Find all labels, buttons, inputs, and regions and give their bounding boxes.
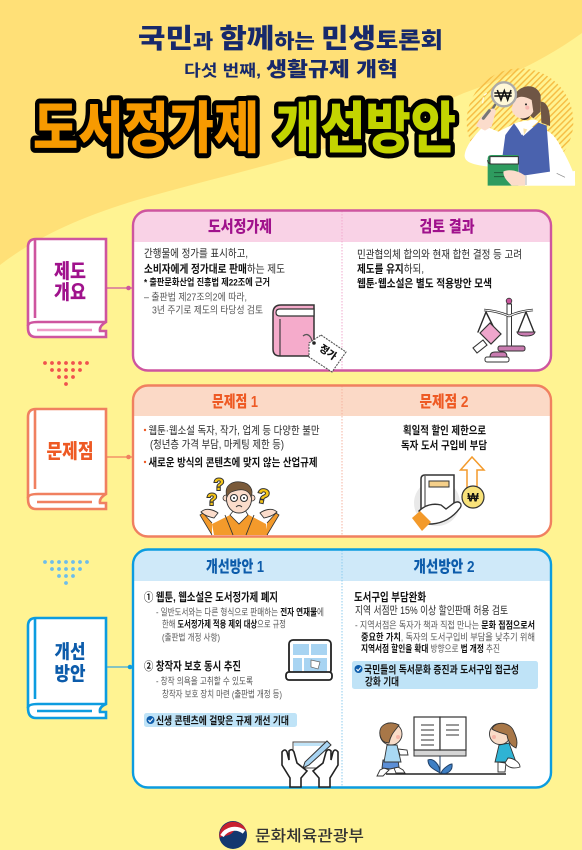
illustration: woman with magnifier and book — [465, 68, 575, 186]
text: 개선방안 1 항목 1: (출판법 개정 사항) — [162, 632, 220, 642]
text: 문제점 2 설명: 획일적 할인 제한으로 — [403, 423, 486, 437]
text: 개선방안 1 항목 2: ② 창작자 보호 동시 추진 — [144, 659, 241, 673]
book label: 제도 개요: 개요 — [54, 281, 86, 304]
text: 개선방안 1 항목 1: - 일반도서와는 다른 형식으로 판매하는 전자 연재물에 — [156, 606, 324, 618]
connector 3 — [107, 665, 132, 669]
child running right — [490, 723, 520, 772]
text: 도서정가제 설명: 3년 주기로 제도의 타당성 검토 — [152, 304, 263, 316]
text: 도서정가제 설명: 간행물에 정가를 표시하고, — [144, 246, 248, 260]
dots: blue — [43, 560, 89, 585]
heading: 문제점 2: 문제점 2 — [420, 393, 469, 411]
text: 개선방안 2 설명 — [354, 590, 535, 655]
panel: 개선방안 — [133, 550, 551, 788]
footer: ministry logo — [219, 821, 364, 849]
text: 개선방안 1 항목 2: 창작자 보호 장치 마련 (출판법 개정 등) — [162, 688, 282, 700]
book label: 문제점: 문제점 — [46, 440, 94, 463]
connector 2 — [107, 455, 132, 459]
text: 도서정가제 설명: 소비자에게 정가대로 판매하는 제도 — [144, 262, 285, 276]
heading: 문제점 1: 문제점 1 — [212, 393, 258, 411]
text: 개선방안 2 설명: 지역서점 할인을 확대 방향으로 법 개정 추진 — [361, 643, 500, 655]
icon: confused man: ? — [207, 490, 217, 509]
text: 도서정가제 설명 — [144, 246, 285, 316]
book label: 제도 개요: 제도 — [54, 260, 86, 283]
text: 검토 결과 설명: 민관협의체 합의와 현재 합헌 결정 등 고려 — [357, 248, 522, 261]
icon: hand holding book with rising price: ₩ — [467, 490, 479, 504]
icon: confused man: ? — [255, 485, 271, 509]
heading: 도서정가제: 도서정가제 — [208, 218, 272, 236]
child running left — [377, 723, 408, 776]
title line 1: 국민 과 함께 하는 민생토론회 — [138, 24, 443, 54]
heading: 검토 결과: 검토 결과 — [420, 218, 475, 236]
book label: 개선 방안: 방안 — [54, 663, 86, 685]
icon: hand holding book with rising price — [412, 457, 484, 531]
text: 검토 결과 설명: 웹툰·웹소설은 별도 적용방안 모색 — [357, 276, 492, 290]
text: 검토 결과 설명: 제도를 유지하되, — [357, 262, 424, 276]
text: 개선방안 1 항목 1: 한해 도서정가제 적용 제외 대상으로 규정 — [162, 618, 286, 630]
text: 개선방안 1 항목 1 — [144, 590, 324, 642]
title: 개선방안 — [275, 97, 456, 160]
text: 개선방안 2 설명: 도서구입 부담완화 — [354, 590, 426, 604]
text: 검토 결과 설명 — [357, 248, 522, 290]
main headline: 도서정가제 — [33, 97, 259, 160]
text: 개선방안 2 설명: - 지역서점은 독자가 책과 직접 만나는 문화 접점으로서 — [355, 620, 535, 632]
illustration: children and open book — [377, 717, 520, 776]
dots: red — [43, 361, 89, 386]
text: 문제점 1 설명 — [144, 424, 320, 469]
heading: 개선방안 1: 개선방안 1 — [206, 558, 264, 576]
callout: 기대효과 2: 강화 기대 — [365, 675, 399, 688]
text: 문제점 2 설명: 독자 도서 구입비 부담 — [401, 439, 487, 452]
title — [33, 24, 456, 160]
text: 개선방안 2 설명: 지역 서점만 15% 이상 할인판매 허용 검토 — [355, 604, 508, 617]
icon: confused man — [200, 475, 279, 535]
book label: 개선 방안 — [28, 618, 106, 718]
book label: 문제점 — [28, 409, 106, 509]
icon: taegeuk — [219, 821, 247, 849]
text: 개선방안 1 항목 1: ① 웹툰, 웹소설은 도서정가제 폐지 — [144, 590, 278, 604]
heading: 개선방안 2: 개선방안 2 — [414, 558, 475, 576]
callout: 기대효과 2: 국민들의 독서문화 증진과 도서구입 접근성 — [364, 663, 519, 676]
text: 도서정가제 설명: – 출판법 제27조의2에 따라, — [144, 292, 247, 304]
book label: 개선 방안: 개선 — [54, 641, 86, 663]
connector 1 — [107, 286, 132, 290]
ministry name: 문화체육관광부 — [255, 827, 364, 845]
text: 문제점 1 설명: (청년층 가격 부담, 마케팅 제한 등) — [150, 438, 284, 451]
panel: 문제점 — [133, 386, 551, 536]
title line 2: 다섯 번째, 생활규제 개혁 — [184, 58, 398, 81]
callout: 기대효과 2 — [352, 661, 538, 689]
text: 개선방안 1 항목 2 — [144, 659, 282, 700]
text: 개선방안 1 항목 2: - 창작 의욕을 고취할 수 있도록 — [156, 676, 253, 688]
icon: confused man: ? — [214, 475, 224, 494]
icon: book with price tag: 정가 — [317, 342, 339, 363]
icon: scales and gavel — [473, 298, 535, 362]
text: 도서정가제 설명: * 출판문화산업 진흥법 제22조에 근거 — [144, 276, 270, 288]
panel: 도서정가제 / 검토 결과 — [133, 210, 551, 372]
icon: book with price tag — [273, 305, 346, 372]
open book — [414, 717, 466, 756]
text: 문제점 1 설명: 웹툰·웹소설 독자, 작가, 업계 등 다양한 불만 — [148, 424, 320, 437]
callout: 기대효과 1: 신생 콘텐츠에 걸맞은 규제 개선 기대 — [156, 714, 289, 727]
icon: hands with tablet and pen — [282, 741, 338, 787]
text: 문제점 2 설명 — [401, 423, 487, 452]
text: 개선방안 2 설명: 중요한 가치, 독자의 도서구입비 부담을 낮추기 위해 — [361, 632, 535, 644]
icon: laptop webtoon — [286, 640, 332, 680]
text: 문제점 1 설명: 새로운 방식의 콘텐츠에 맞지 않는 산업규제 — [148, 455, 318, 469]
plant — [428, 756, 452, 773]
book label: 제도 개요 — [28, 239, 106, 337]
